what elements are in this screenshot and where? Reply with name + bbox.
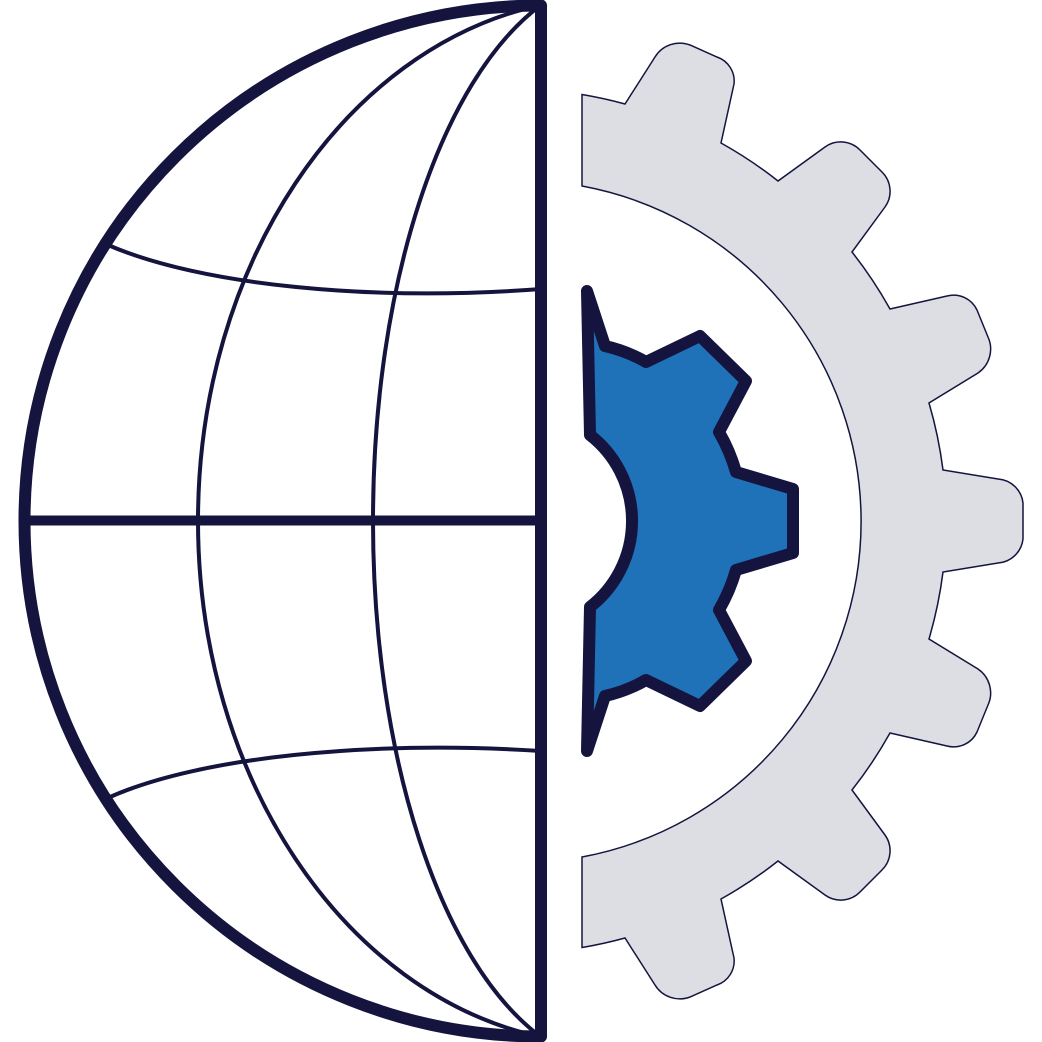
globe parallel: lower [110,748,541,797]
globe outline [25,6,541,1036]
globe meridian: outer [198,5,541,1037]
icon: inner blue half gear [587,291,793,751]
globe equator [24,516,541,526]
globe meridian: inner [373,5,541,1037]
globe parallel: upper [108,245,541,293]
icon: outer grey half gear [582,43,1023,999]
icon: half globe [24,5,541,1037]
